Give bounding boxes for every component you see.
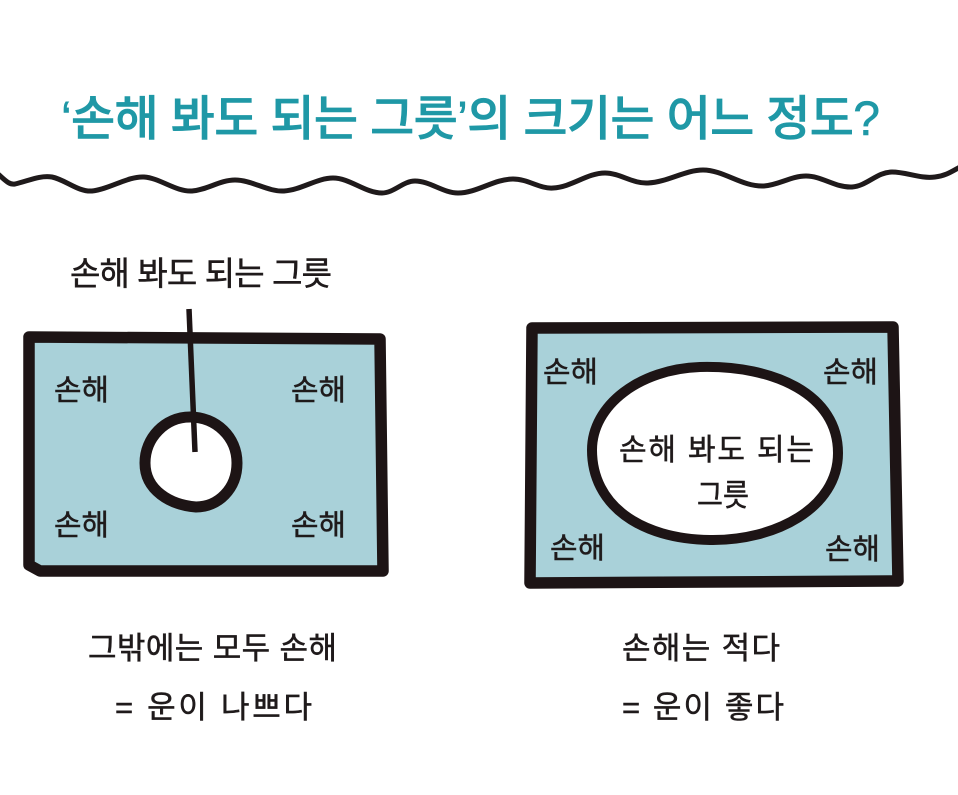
- left label: 손해 봐도 되는 그릇: 손해 봐도 되는 그릇: [70, 255, 332, 292]
- large white oval: [592, 367, 838, 540]
- right blue panel: [530, 327, 898, 583]
- left caption: [88, 631, 337, 725]
- loss label bottom left: 손해: [550, 533, 605, 565]
- pointer line: [189, 309, 195, 452]
- left blue panel: [29, 337, 383, 571]
- right caption: [622, 631, 784, 725]
- loss label bottom left: 손해: [54, 510, 109, 542]
- loss label top right: 손해: [291, 375, 346, 407]
- right diagram: large bowl: [530, 327, 898, 583]
- caption line 2: = 운이 좋다: [622, 690, 784, 725]
- loss label top left: 손해: [543, 357, 598, 389]
- loss label top right: 손해: [823, 357, 878, 389]
- caption line 1: 손해는 적다: [622, 631, 780, 666]
- loss label top left: 손해: [54, 375, 109, 407]
- left diagram: small bowl: [29, 309, 383, 571]
- loss label bottom right: 손해: [825, 534, 880, 566]
- small white circle: [145, 417, 237, 507]
- caption line 1: 그밖에는 모두 손해: [88, 631, 337, 666]
- oval label line 1: 손해 봐도 되는: [619, 434, 814, 467]
- wavy divider: [0, 167, 958, 193]
- caption line 2: = 운이 나쁘다: [115, 690, 312, 725]
- oval label line 2: 그릇: [697, 478, 749, 513]
- loss label bottom right: 손해: [291, 510, 346, 542]
- title: ‘손해 봐도 되는 그릇’의 크기는 어느 정도?: [61, 93, 880, 146]
